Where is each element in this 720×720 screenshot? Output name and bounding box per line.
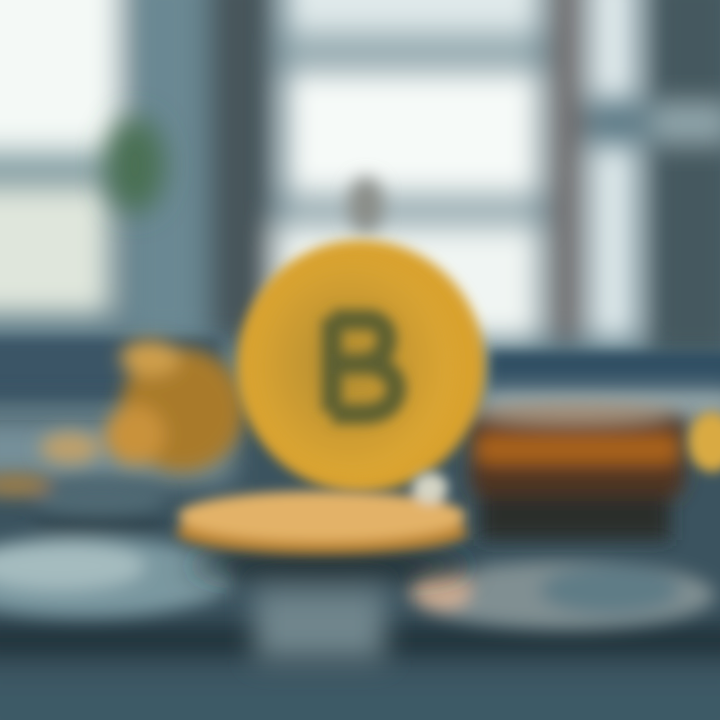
plate: left silver coin stack [0, 474, 235, 617]
plate: right silver coin stack [410, 561, 715, 629]
table surface [0, 392, 720, 720]
large gold coin [237, 240, 485, 492]
right edge gold coin [688, 412, 720, 472]
coin symbol [332, 318, 396, 414]
right copper coin stack [470, 404, 685, 540]
window sill band [0, 338, 720, 403]
plant [105, 117, 165, 213]
left gold coin pile [40, 340, 244, 472]
coin bail [348, 177, 384, 233]
window background [0, 0, 720, 420]
coin base disc [176, 472, 468, 554]
center column reflection [190, 552, 470, 660]
